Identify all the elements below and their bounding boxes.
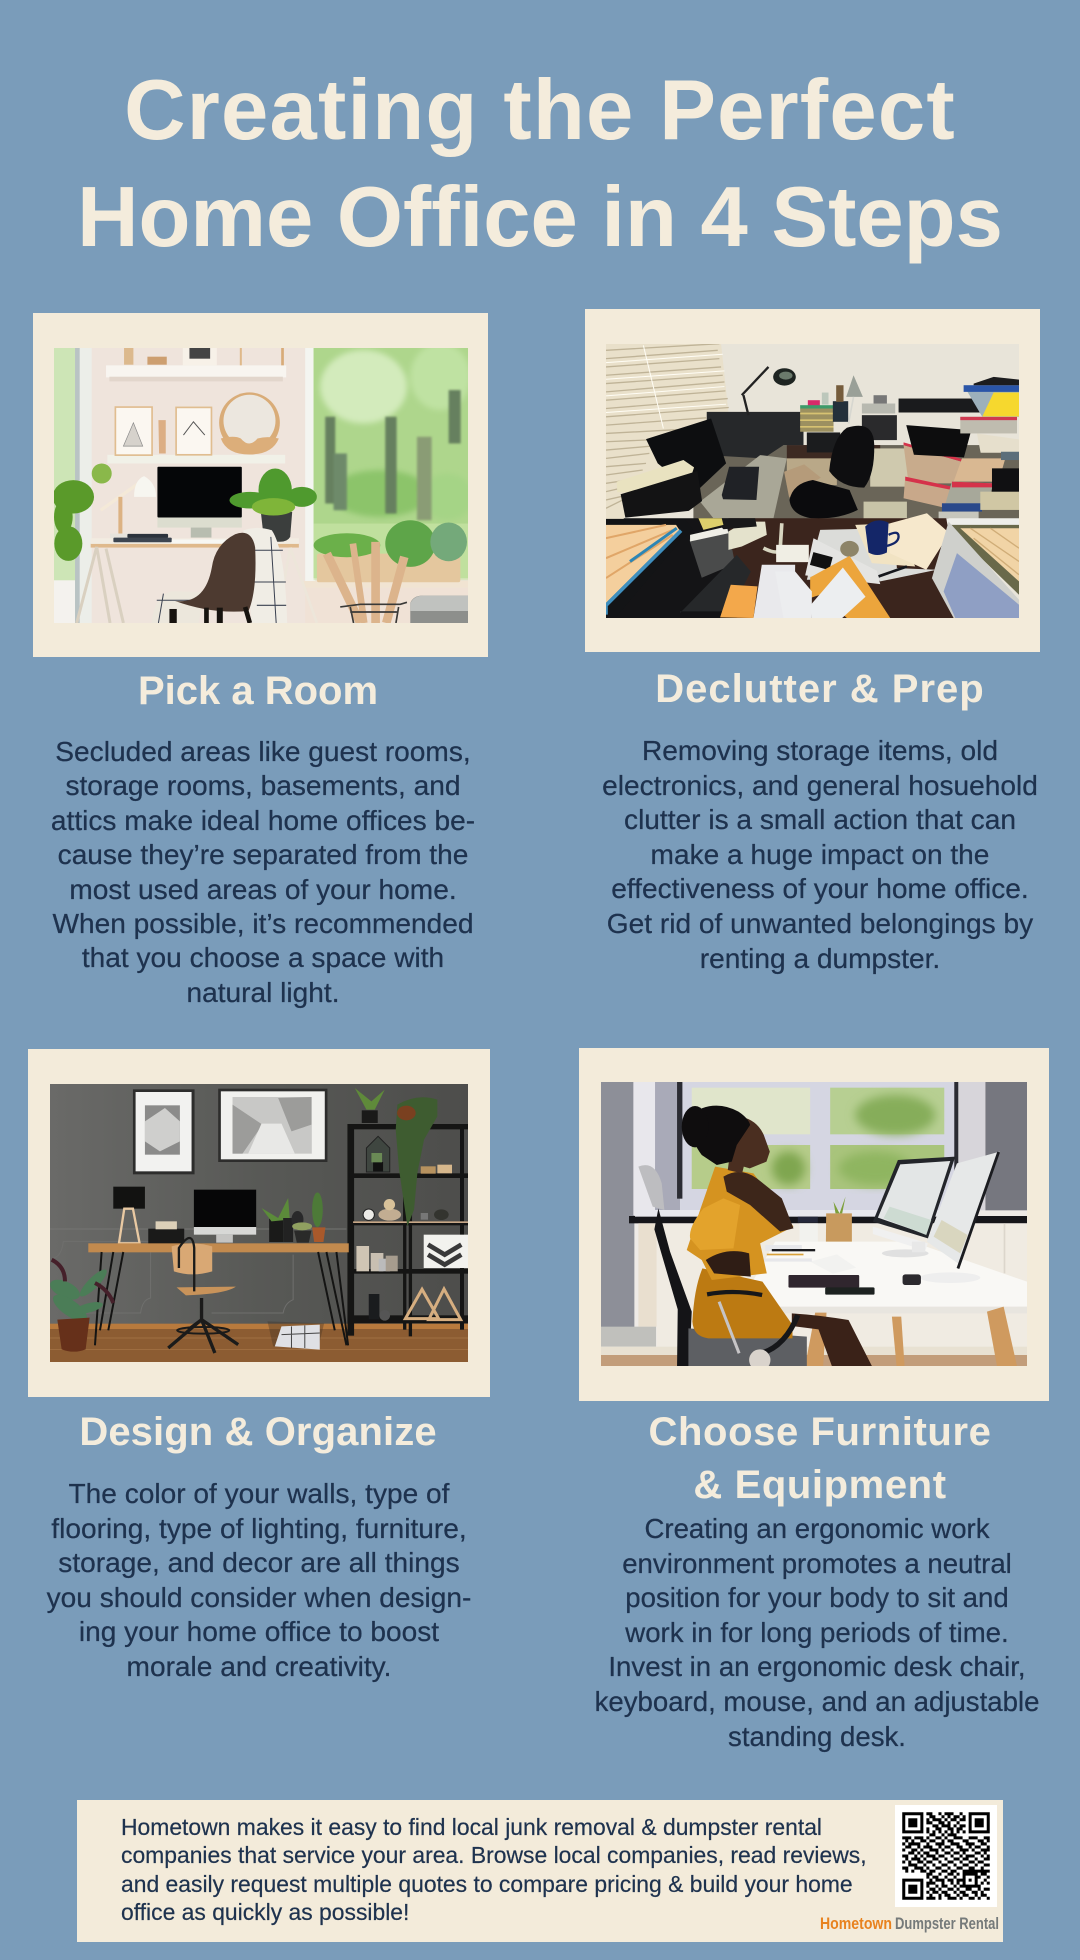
right bin (946, 518, 1019, 533)
banner text (121, 1814, 867, 1926)
monitor (646, 418, 726, 493)
heading: furniture: Choose Furniture (649, 1410, 991, 1454)
papers (807, 528, 937, 581)
logo: Hometown Dumpster Rental: Hometown (820, 1915, 892, 1933)
text: pick a room: attics make ideal home offices be- (51, 805, 475, 836)
chair back (638, 1165, 664, 1210)
chair (172, 1243, 212, 1274)
text: pick a room: that you choose a space with (82, 942, 444, 973)
monitors (873, 1157, 955, 1238)
woman (692, 1268, 792, 1338)
stacked bins (904, 445, 962, 483)
window (680, 1082, 957, 1212)
text: furniture: standing desk. (728, 1721, 906, 1752)
text: design: ing your home office to boost (79, 1616, 439, 1647)
text: design: The color of your walls, type of (68, 1478, 449, 1509)
desk (91, 544, 299, 548)
mid-ground and foreground base tones (693, 445, 1019, 520)
back desk clutter (787, 445, 880, 458)
text: furniture: Invest in an ergonomic desk chair, (608, 1651, 1026, 1682)
panel: design photo (28, 1049, 490, 1397)
desk (88, 1243, 349, 1252)
text: declutter: clutter is a small action that can (624, 804, 1016, 835)
text: furniture (595, 1513, 1039, 1752)
text: design: flooring, type of lighting, furniture, (51, 1513, 467, 1544)
desk (753, 1242, 1027, 1313)
icon: QR code (895, 1805, 997, 1907)
front left file case (606, 519, 693, 617)
heading: furniture: & Equipment (693, 1463, 947, 1507)
glass desk (700, 455, 787, 518)
heading: design: Design & Organize (79, 1410, 437, 1454)
text: pick a room: Secluded areas like guest rooms, (55, 736, 471, 767)
left plant (53, 463, 112, 561)
text: furniture: work in for long periods of time. (625, 1617, 1009, 1648)
heading: declutter: Declutter & Prep (655, 667, 985, 711)
text: furniture: keyboard, mouse, and an adjustable (595, 1686, 1039, 1717)
banner text: office as quickly as possible! (121, 1899, 409, 1925)
banner text: and easily request multiple quotes to compare pricing & build your home (121, 1871, 853, 1897)
text: design: morale and creativity. (127, 1651, 391, 1682)
monitor (157, 467, 242, 518)
armrest (707, 1292, 762, 1295)
heading: pick a room: Pick a Room (138, 669, 378, 713)
text: pick a room: When possible, it’s recommended (52, 908, 474, 939)
desk stuff (810, 1254, 856, 1274)
monitor (194, 1190, 256, 1227)
banner text: Hometown makes it easy to find local junk removal & dumpster rental (121, 1814, 822, 1840)
basket (267, 1321, 324, 1348)
text: declutter: renting a dumpster. (700, 943, 940, 974)
text: design: storage, and decor are all things (58, 1547, 460, 1578)
moulding (50, 1228, 346, 1230)
text: design: you should consider when design- (47, 1582, 471, 1613)
text: declutter (602, 735, 1038, 974)
panel: declutter photo (585, 309, 1040, 652)
panel: equipment photo (579, 1048, 1049, 1401)
floor plant (47, 1266, 110, 1326)
posters (133, 1089, 195, 1174)
text: declutter: make a huge impact on the (651, 839, 989, 870)
title: Home Office in 4 Steps (77, 170, 1003, 265)
plant on desk (261, 512, 292, 542)
text: declutter: electronics, and general hosuehold (602, 770, 1038, 801)
printer stack (617, 460, 694, 492)
chair and blanket (243, 528, 287, 623)
shelf (347, 1124, 468, 1336)
sill (629, 1216, 1027, 1223)
desk plants (269, 1219, 283, 1242)
chair & cabinets (784, 464, 821, 498)
shelf objects (355, 1088, 385, 1110)
heading: furniture (649, 1410, 991, 1507)
lamp (101, 479, 144, 510)
text: design (46, 1478, 471, 1682)
text: furniture: environment promotes a neutral (622, 1548, 1012, 1579)
text: pick a room: cause they’re separated from the (58, 839, 468, 870)
banner text: companies that service your area. Browse local companies, read reviews, (121, 1842, 867, 1868)
text: declutter: effectiveness of your home office. (611, 873, 1029, 904)
front desk (728, 518, 965, 618)
title (77, 63, 1003, 265)
callout banner (77, 1800, 1003, 1942)
box & books (148, 1229, 184, 1245)
text: declutter: Removing storage items, old (642, 735, 998, 766)
text: furniture: position for your body to sit and (625, 1582, 1009, 1613)
text: pick a room: storage rooms, basements, and (65, 770, 461, 801)
planter (317, 554, 460, 582)
title: Creating the Perfect (124, 63, 956, 158)
text: pick a room: natural light. (186, 977, 340, 1008)
shelves (106, 365, 286, 377)
text: furniture: Creating an ergonomic work (644, 1513, 990, 1544)
desk items back (799, 1223, 818, 1244)
panel: pick a room photo (33, 313, 488, 657)
logo: Hometown Dumpster Rental (820, 1915, 999, 1933)
rolls (327, 542, 404, 623)
text: declutter: Get rid of unwanted belongings by (607, 908, 1033, 939)
seat (688, 1328, 807, 1366)
text: pick a room (51, 736, 475, 1008)
text: pick a room: most used areas of your home. (69, 874, 457, 905)
lamp (113, 1187, 145, 1209)
floor (50, 1324, 468, 1330)
blinds (606, 344, 732, 520)
